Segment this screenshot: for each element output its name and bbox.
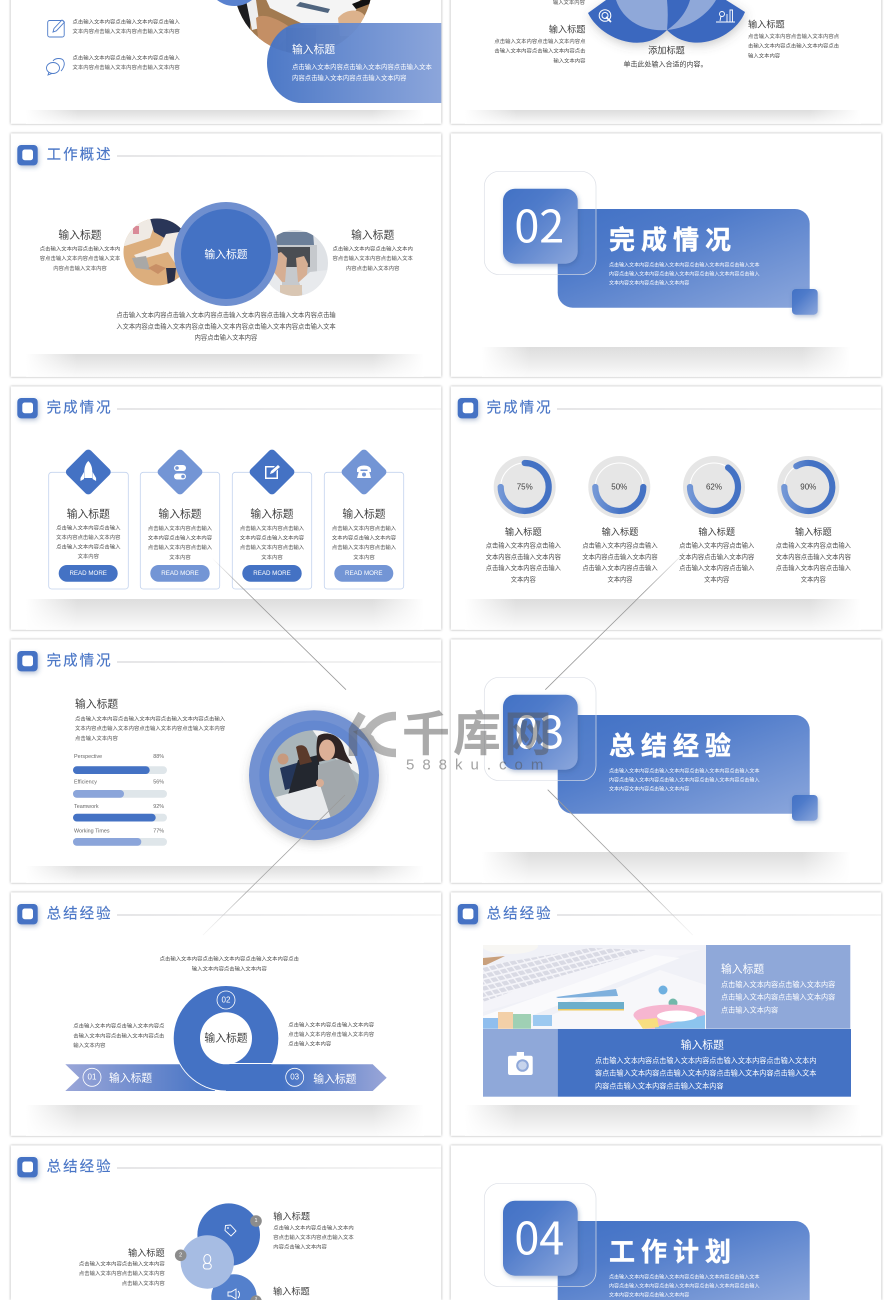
photo: business meeting — [237, 0, 370, 54]
card text: 文本内容 — [78, 552, 100, 560]
label column 3: 文本内容 — [704, 574, 730, 583]
button — [242, 565, 302, 582]
slide floor shadow — [482, 347, 850, 377]
text: top: 点击输入文本内容点击输入文本内容点击输入文本内容点击 — [160, 955, 300, 963]
small corner tile — [792, 795, 818, 821]
badge 01 — [83, 1068, 101, 1086]
panel: slide 10 image with text blocks — [451, 892, 881, 1136]
text: left: 输入文本内容 — [73, 1041, 106, 1049]
text: lower description: 点击输入文本内容点击输入文本内容点击输入文本内容点击输入文本内容点击输 — [116, 310, 336, 318]
callout text: 内容点击输入文本内容点击输入文本内容 — [292, 72, 407, 82]
button: READ MORE — [161, 570, 199, 577]
slide card — [11, 0, 441, 124]
label column 4: 点击输入文本内容点击输入 — [776, 540, 852, 549]
icon: camera — [508, 1052, 533, 1075]
button: READ MORE — [253, 570, 291, 577]
description: 点击输入文本内容 — [75, 734, 119, 742]
card text: 文本内容 — [261, 553, 283, 561]
icon: note and pencil — [48, 20, 64, 37]
panel: slide 8 section 03 — [451, 639, 881, 883]
center circle — [174, 202, 278, 306]
card heading: 输入标题 — [158, 507, 202, 521]
petal diagram — [588, 0, 745, 43]
ring 75%: 75% — [517, 482, 533, 492]
label column 4 — [776, 526, 852, 583]
text block: upper right — [706, 945, 850, 1029]
text: left: 击输入文本内容点击输入文本内容点击 — [73, 1031, 165, 1039]
label column 2: 点击输入文本内容点击输入 — [582, 562, 658, 572]
block text: 点击输入文本内容点击输入文本内容点击输入文本内容点击输入文本内 — [595, 1056, 816, 1065]
slide card — [451, 639, 881, 883]
section banner — [558, 1221, 810, 1300]
badge 03: 03 — [290, 1072, 300, 1082]
text: left petal: 击输入文本内容点击输入文本内容点击 — [494, 47, 586, 55]
slide floor shadow — [465, 599, 861, 630]
section banner — [558, 715, 810, 814]
card heading: 输入标题 — [67, 507, 110, 521]
label column 4: 点击输入文本内容点击输入 — [776, 562, 852, 572]
glass outline — [484, 677, 596, 781]
button — [59, 565, 118, 582]
bar: Efficiency: 56% — [153, 780, 164, 786]
badge 3 — [250, 1295, 262, 1300]
label column 3: 点击输入文本内容点击输入 — [679, 540, 755, 549]
callout text: 点击输入文本内容点击输入文本内容点击输入文本 — [292, 62, 433, 70]
section description: 内容点击输入文本内容点击输入文本内容点击输入文本内容点击输入 — [609, 777, 759, 784]
text block: lower — [558, 1029, 851, 1097]
photo circle — [249, 710, 379, 840]
button — [334, 565, 393, 582]
heading: item 2: 输入标题 — [128, 1247, 165, 1258]
card text: 点击输入文本内容点击输入 — [332, 543, 397, 551]
card text: 点击输入文本内容点击输入 — [56, 542, 121, 550]
slide card — [451, 133, 881, 377]
slide floor shadow — [465, 1105, 861, 1136]
arrow label left: 输入标题 — [109, 1070, 152, 1084]
text: right: 点击输入文本内容 — [288, 1040, 332, 1048]
glass outline — [484, 1183, 596, 1287]
label column 4: 文本内容 — [801, 574, 827, 583]
label column 2: 文本内容 — [607, 574, 633, 583]
text: speech description: 点击输入文本内容点击输入文本内容点击输入 — [72, 54, 180, 62]
text: note description: 文本内容点击输入文本内容点击输入文本内容 — [72, 27, 180, 35]
heading: 完成情况 — [487, 399, 553, 416]
text: note description: 点击输入文本内容点击输入文本内容点击输入 — [72, 18, 180, 26]
icon: telephone diamond — [340, 448, 388, 496]
label column 2: 输入标题 — [602, 526, 638, 537]
watermark — [353, 708, 555, 774]
panel: slide 2 petal diagram — [451, 0, 881, 124]
header rule — [557, 914, 881, 916]
header rule — [117, 155, 441, 157]
ring 90%: 90% — [800, 482, 816, 492]
icon: toggles diamond — [156, 448, 204, 496]
block text: 内容点击输入文本内容点击输入文本内容 — [595, 1082, 724, 1091]
card text: 点击输入文本内容点击输入 — [240, 543, 305, 551]
glass outline — [484, 171, 596, 275]
text: left petal: 点击输入文本内容点击输入文本内容点 — [494, 37, 586, 45]
section description: 文本内容文本内容点击输入文本内容 — [609, 1292, 689, 1299]
icon: rocket diamond — [64, 448, 112, 496]
text: right: 点击输入文本内容点击输入文本内 — [332, 244, 413, 252]
badge 03 — [286, 1068, 304, 1086]
callout heading: 输入标题 — [292, 42, 335, 56]
heading: 总结经验 — [47, 1158, 113, 1175]
section description: 点击输入文本内容点击输入文本内容点击输入文本内容点击输入文本 — [609, 1274, 759, 1281]
section description: 点击输入文本内容点击输入文本内容点击输入文本内容点击输入文本 — [609, 262, 759, 269]
slide floor shadow — [465, 110, 861, 124]
header badge — [17, 398, 38, 418]
slide card — [11, 892, 441, 1136]
bar: Working Times: Working Times — [74, 829, 110, 835]
bar: Teamwork: Teamwork — [74, 804, 99, 810]
bar: Teamwork: 92% — [153, 804, 164, 810]
card text: 点击输入文本内容点击输入 — [332, 524, 397, 532]
header badge — [458, 398, 478, 418]
text: top: 输入文本内容点击输入文本内容 — [192, 964, 267, 972]
heading: item 1: 输入标题 — [273, 1211, 310, 1222]
heading: left: 输入标题 — [58, 227, 102, 241]
text: item 2: 点击输入文本内容 — [122, 1279, 165, 1287]
text: right petal: 点击输入文本内容点击输入文本内容点 — [748, 32, 840, 40]
icon: bars and magnifier — [716, 10, 735, 22]
panel: slide 5 four cards — [11, 386, 441, 630]
button: READ MORE — [345, 570, 383, 577]
heading: add title: 添加标题 — [648, 44, 685, 56]
number tile — [503, 189, 578, 264]
section title: 完成情况 — [609, 225, 737, 255]
heading: 工作概述 — [47, 146, 113, 163]
slide card — [451, 892, 881, 1136]
text: left petal: 输入文本内容 — [553, 56, 586, 64]
arrow label right: 输入标题 — [313, 1072, 357, 1086]
icon: target — [599, 10, 611, 22]
header badge — [458, 904, 478, 924]
photo: team at table — [268, 728, 360, 822]
button: READ MORE — [69, 570, 107, 577]
bar: Working Times: 77% — [153, 829, 164, 835]
card text: 文本内容 — [353, 553, 375, 561]
block text: 点击输入文本内容 — [721, 1006, 778, 1015]
label column 2 — [582, 526, 658, 583]
block text: 点击输入文本内容点击输入文本内容 — [721, 993, 835, 1002]
ring 50% — [588, 456, 650, 518]
circle 1 with tag — [197, 1203, 260, 1266]
label column 1: 点击输入文本内容点击输入 — [486, 540, 562, 549]
card heading: 输入标题 — [250, 507, 294, 521]
header rule — [117, 408, 441, 410]
button — [150, 565, 210, 582]
bar: Working Times — [73, 829, 167, 846]
bar: Perspective: 88% — [153, 754, 164, 760]
panel: slide 4 section 02 — [451, 133, 881, 377]
text: item 2: 点击输入文本内容点击输入文本内容 — [79, 1260, 165, 1268]
card 2 — [140, 448, 220, 589]
icon: edit diamond — [248, 448, 296, 496]
photo: desk meeting — [124, 218, 181, 286]
text: right: 内容点击输入文本内容 — [346, 264, 400, 272]
text: item 1: 容点击输入文本内容点击输入文本 — [273, 1233, 354, 1241]
header badge — [17, 1157, 38, 1177]
label column 1: 点击输入文本内容点击输入 — [486, 562, 562, 572]
slide card — [11, 639, 441, 883]
header badge — [17, 145, 38, 165]
slide card — [451, 1145, 881, 1300]
panel: slide 7 skill bars and photo — [11, 639, 441, 883]
slide floor shadow — [26, 110, 424, 124]
card text: 点击输入文本内容点击输入 — [56, 523, 121, 531]
slide floor shadow — [26, 599, 424, 630]
header rule — [117, 661, 441, 663]
text: item 2: 点击输入文本内容点击输入文本内容 — [79, 1269, 165, 1277]
panel: slide 6 progress rings — [451, 386, 881, 630]
number tile — [503, 695, 578, 770]
diagonal line upper right — [545, 548, 689, 690]
badge 1: 1 — [254, 1218, 258, 1224]
bar: Teamwork — [73, 804, 167, 822]
section number: 04 — [514, 1202, 564, 1268]
card text: 点击输入文本内容点击输入 — [240, 524, 305, 532]
panel: slide 12 section 04 — [451, 1145, 881, 1300]
ring 75% — [494, 456, 556, 518]
label column 1: 文本内容 — [511, 574, 537, 583]
slide floor shadow — [482, 852, 850, 883]
card text: 文本内容点击输入文本内容 — [148, 534, 213, 542]
diagonal line lower right — [548, 790, 693, 935]
card text: 文本内容点击输入文本内容 — [240, 534, 305, 542]
section description: 点击输入文本内容点击输入文本内容点击输入文本内容点击输入文本 — [609, 768, 759, 775]
heading: left petal: 输入标题 — [549, 23, 586, 34]
heading: 总结经验 — [47, 905, 113, 922]
section banner — [558, 209, 810, 308]
slide card — [11, 1145, 441, 1300]
subheading: 输入标题 — [75, 697, 118, 711]
card text: 点击输入文本内容点击输入 — [148, 524, 213, 532]
card text: 文本内容 — [169, 553, 191, 561]
slide floor shadow — [26, 866, 424, 883]
card 1 — [49, 448, 128, 589]
text: left: 点击输入文本内容点击输入文本内 — [40, 244, 120, 252]
text: left: 点击输入文本内容点击输入文本内容点 — [73, 1022, 165, 1030]
section description: 文本内容文本内容点击输入文本内容 — [609, 786, 689, 793]
text: speech description: 文本内容点击输入文本内容点击输入文本内容 — [72, 63, 180, 71]
description: 文本内容点击输入文本内容点击输入文本内容点击输入文本内容 — [75, 724, 226, 732]
badge 2: 2 — [179, 1252, 182, 1258]
text: center note: 单击此处输入合适的内容。 — [624, 60, 708, 68]
label column 2: 点击输入文本内容点击输入 — [582, 540, 658, 549]
card 4 — [324, 448, 404, 589]
ring label: 输入标题 — [204, 1030, 248, 1044]
text: lower description: 入文本内容点击输入文本内容点击输入文本内容点击输入文本内容点击输入文本 — [116, 321, 336, 330]
diagonal line upper left — [212, 558, 346, 690]
text: right petal: 击输入文本内容点击输入文本内容点击 — [748, 42, 840, 50]
description: 点击输入文本内容点击输入文本内容点击输入文本内容点击输入 — [75, 715, 226, 723]
section number: 02 — [514, 190, 564, 256]
text: item 1: 点击输入文本内容点击输入文本内 — [273, 1224, 354, 1232]
label column 3: 点击输入文本内容点击输入 — [679, 562, 755, 572]
badge 02 — [217, 991, 235, 1009]
label column 1 — [486, 526, 562, 583]
section description: 内容点击输入文本内容点击输入文本内容点击输入文本内容点击输入 — [609, 271, 759, 278]
heading: right: 输入标题 — [351, 227, 394, 241]
bar: Efficiency: Efficiency — [74, 780, 97, 786]
section title: 工作计划 — [609, 1237, 737, 1267]
slide card — [451, 386, 881, 630]
photo: keyboard and charts — [482, 938, 706, 1029]
watermark name: 千库网 — [402, 708, 555, 762]
camera tile — [483, 1029, 558, 1097]
section number: 03 — [514, 696, 564, 762]
card text: 点击输入文本内容点击输入 — [148, 543, 213, 551]
badge 1 — [250, 1215, 262, 1227]
text: right: 点击输入文本内容点击输入文本内容 — [288, 1030, 375, 1038]
slide card — [451, 0, 881, 124]
text: lower description: 内容点击输入文本内容 — [195, 332, 258, 341]
ring 62%: 62% — [706, 482, 722, 492]
circle 3 with speaker — [211, 1274, 257, 1300]
label column 4: 文本内容点击输入文本内容 — [776, 552, 852, 560]
card text: 文本内容点击输入文本内容 — [332, 534, 397, 542]
badge 2 — [175, 1250, 186, 1261]
callout panel — [267, 23, 441, 103]
label column 3: 输入标题 — [698, 526, 735, 537]
panel: slide 1 intro with photo — [11, 0, 441, 124]
label column 1: 文本内容点击输入文本内容 — [486, 552, 562, 560]
text: item 1: 内容点击输入文本内容 — [273, 1243, 328, 1251]
card 3 — [232, 448, 312, 589]
slide floor shadow — [26, 354, 424, 377]
slide card — [11, 386, 441, 630]
circle 2 with person — [181, 1235, 234, 1289]
heading: right petal: 输入标题 — [748, 18, 785, 29]
photo: laptop typing — [269, 230, 328, 296]
block text: 容点击输入文本内容点击输入文本内容点击输入文本内容点击输入文本 — [595, 1068, 816, 1077]
header rule — [557, 408, 881, 410]
header badge — [17, 904, 38, 924]
header rule — [117, 1167, 441, 1169]
watermark url: 588ku.com — [406, 756, 551, 774]
text: right petal: 输入文本内容 — [748, 51, 781, 59]
small corner tile — [792, 289, 818, 315]
block heading: 输入标题 — [681, 1038, 724, 1052]
panel: slide 11 circles — [11, 1145, 441, 1300]
icon: speech bubbles — [46, 58, 64, 75]
number tile — [503, 1201, 578, 1276]
block text: 点击输入文本内容点击输入文本内容 — [721, 980, 835, 989]
slide floor shadow — [26, 1105, 424, 1136]
text: left: 容点击输入文本内容点击输入文本 — [40, 254, 121, 262]
bar: Perspective — [73, 754, 167, 774]
text: right: 点击输入文本内容点击输入文本内容 — [288, 1021, 375, 1029]
ring 90% — [777, 456, 839, 518]
loop arrow — [65, 985, 387, 1092]
panel: slide 9 loop arrow diagram — [11, 892, 441, 1136]
label column 3: 文本内容点击输入文本内容 — [679, 552, 755, 560]
badge 01: 01 — [88, 1072, 97, 1082]
section title: 总结经验 — [609, 731, 737, 761]
heading: item 3: 输入标题 — [273, 1286, 310, 1297]
label column 3 — [679, 526, 755, 583]
heading: 总结经验 — [487, 905, 553, 922]
header rule — [117, 914, 441, 916]
label column 4: 输入标题 — [795, 526, 832, 537]
decorative blue circle — [206, 0, 263, 6]
header badge — [17, 651, 38, 671]
bar: Perspective: Perspective — [74, 754, 102, 760]
text: right: 容点击输入文本内容点击输入文本 — [332, 254, 414, 262]
section description: 文本内容文本内容点击输入文本内容 — [609, 280, 689, 287]
ring 62% — [683, 456, 745, 518]
card heading: 输入标题 — [342, 507, 386, 521]
ring 50%: 50% — [611, 482, 627, 492]
badge 02: 02 — [222, 996, 231, 1004]
center label: 输入标题 — [204, 247, 248, 261]
text: top fragment: 输入文本内容 — [553, 0, 586, 6]
block heading: 输入标题 — [721, 961, 764, 975]
card text: 文本内容点击输入文本内容 — [56, 533, 121, 541]
label column 1: 输入标题 — [505, 526, 542, 537]
panel: slide 3 work overview — [11, 133, 441, 377]
heading: 完成情况 — [47, 399, 113, 416]
diagonal line lower left — [203, 795, 345, 935]
label column 2: 文本内容点击输入文本内容 — [582, 552, 658, 560]
text: left: 内容点击输入文本内容 — [53, 264, 107, 272]
slide card — [11, 133, 441, 377]
heading: 完成情况 — [47, 652, 113, 669]
bar: Efficiency — [73, 780, 167, 798]
watermark logo — [353, 714, 396, 756]
section description: 内容点击输入文本内容点击输入文本内容点击输入文本内容点击输入 — [609, 1283, 759, 1290]
